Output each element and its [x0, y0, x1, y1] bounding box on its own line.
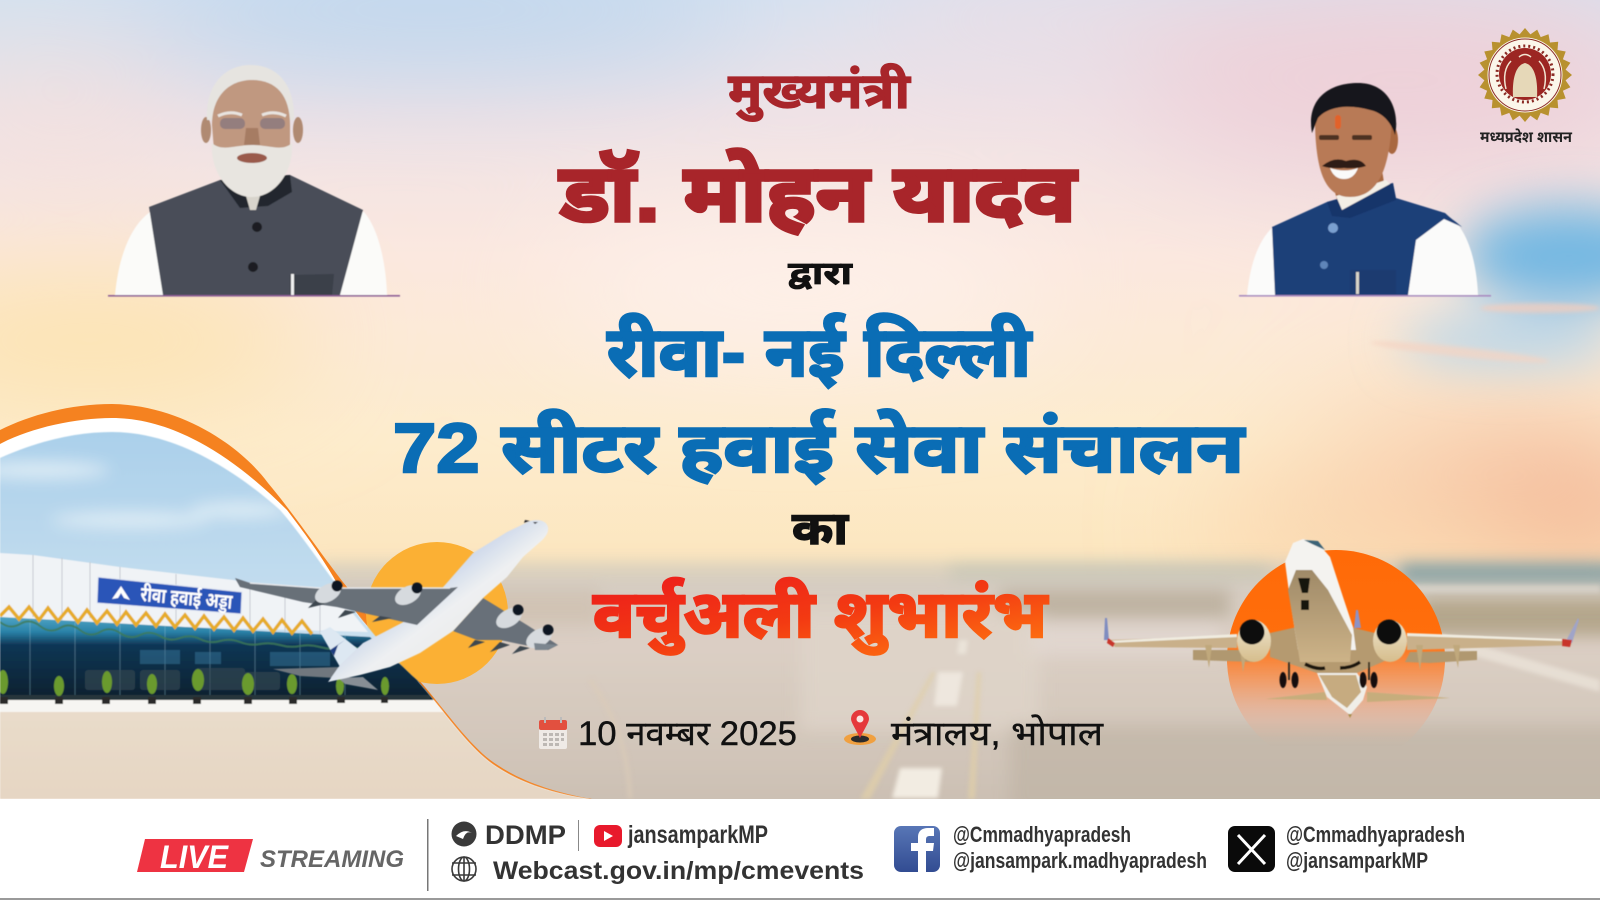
panel: footer	[0, 799, 1600, 900]
text: Facebook handles	[953, 822, 1207, 873]
panel: airport photo	[0, 420, 600, 802]
illustration: left jumbo aeroplane	[235, 520, 558, 690]
right plane orange sun	[1227, 550, 1445, 768]
text: date: 10 नवम्बर 2025	[578, 715, 797, 753]
planters	[0, 669, 389, 704]
icon: DD	[452, 822, 476, 846]
text: YouTube handle: jansamparkMP	[627, 821, 768, 849]
badge: live	[137, 839, 253, 875]
runway streak	[1410, 585, 1600, 692]
text: webcast link: Webcast.gov.in/mp/cmevents	[493, 857, 864, 885]
terminal facade	[0, 553, 368, 632]
text: of: का	[792, 502, 850, 554]
text: X handles: @Cmmadhyapradesh	[1286, 822, 1465, 847]
terminal glass	[0, 617, 440, 700]
runway markings	[590, 640, 981, 799]
badge: live: LIVE	[160, 839, 230, 875]
base line	[1239, 295, 1491, 297]
ground	[0, 711, 590, 799]
runway ground	[300, 572, 1600, 822]
heading: route: रीवा- नई दिल्ली	[607, 313, 1032, 391]
airport sign	[97, 577, 242, 614]
title: Chief Minister: मुख्यमंत्री	[728, 63, 911, 123]
icon: YouTube	[594, 825, 622, 847]
portrait: Chief Minister	[1239, 83, 1491, 297]
text: X handles: @jansamparkMP	[1286, 848, 1428, 873]
illustration: right aeroplane front view	[1104, 539, 1579, 718]
text: DDMP: DDMP	[485, 820, 566, 850]
text: by: द्वारा	[788, 255, 853, 291]
garland	[0, 607, 360, 649]
title: name: डॉ. मोहन यादव	[559, 149, 1078, 238]
portrait: Prime Minister	[108, 65, 400, 297]
icon: location pin	[844, 710, 876, 745]
left plane sun circle	[366, 542, 508, 684]
heading: service: 72 सीटर हवाई सेवा संचालन	[393, 408, 1246, 487]
icon: calendar	[539, 717, 567, 749]
emblem: Madhya Pradesh government seal	[1478, 28, 1572, 122]
text: Facebook handles: @Cmmadhyapradesh	[953, 822, 1131, 847]
emblem caption: मध्यप्रदेश शासन	[1480, 128, 1573, 146]
text: X handles	[1286, 822, 1465, 873]
railing	[0, 695, 430, 700]
airport sign: रीवा हवाई अड्डा	[140, 582, 234, 614]
arc behind airport photo	[0, 404, 592, 799]
base line	[108, 295, 400, 297]
icon: Facebook	[894, 826, 940, 872]
heading: virtual launch: वर्चुअली शुभारंभ	[593, 577, 1049, 655]
text: streaming: STREAMING	[260, 846, 404, 873]
horizon haze	[320, 562, 1600, 815]
icon: globe	[452, 857, 476, 881]
text: venue: मंत्रालय, भोपाल	[891, 715, 1104, 753]
icon: X	[1228, 826, 1275, 872]
text: Facebook handles: @jansampark.madhyapradesh	[953, 848, 1207, 873]
